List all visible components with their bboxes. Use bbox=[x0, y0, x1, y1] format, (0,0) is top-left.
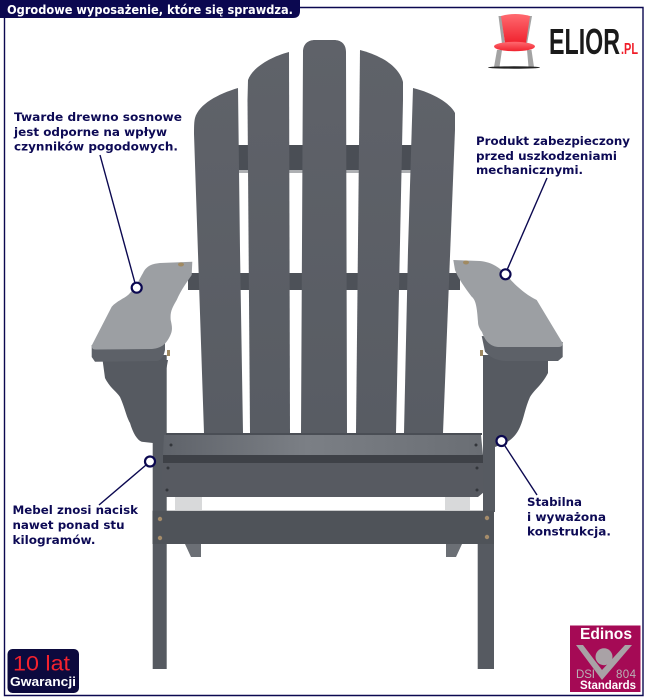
seat back edge bbox=[166, 433, 482, 435]
left arm bracket bbox=[103, 360, 168, 443]
bolt on right post bbox=[480, 350, 483, 356]
marker bbox=[500, 269, 510, 279]
leader line bbox=[507, 178, 547, 270]
backrest slat 4 bbox=[356, 50, 403, 433]
right armrest edge bbox=[482, 336, 563, 361]
left rear shadow under seat bbox=[175, 497, 202, 510]
right arm bolt bbox=[463, 260, 469, 264]
callout text bbox=[13, 110, 182, 154]
callout text: jest odporne na wpływ bbox=[13, 125, 167, 139]
callout text bbox=[12, 503, 138, 547]
right arm bracket bbox=[483, 358, 548, 447]
badge 804: 804 bbox=[616, 669, 637, 681]
right inner leg bbox=[446, 544, 462, 557]
seat gap shadow bbox=[163, 454, 483, 463]
callout text: Stabilna bbox=[527, 495, 582, 509]
warranty years: 10 lat bbox=[13, 652, 70, 676]
header bar: Ogrodowe wyposażenie, które się sprawdza. bbox=[7, 3, 293, 17]
callout text: nawet ponad stu bbox=[12, 518, 124, 532]
left lower leg bbox=[153, 544, 167, 669]
badge V mark bbox=[576, 645, 632, 680]
upper cross bar bbox=[236, 145, 414, 173]
lower cross bar bbox=[188, 273, 460, 290]
leader line bbox=[505, 446, 537, 495]
front rail bbox=[152, 511, 494, 544]
seat screws bbox=[166, 444, 478, 492]
left inner leg bbox=[185, 544, 201, 557]
badge circle bbox=[596, 648, 612, 665]
right rear shadow under seat bbox=[445, 497, 470, 510]
backrest slat 5 bbox=[404, 88, 455, 433]
warranty label: Gwarancji bbox=[10, 674, 76, 689]
callout text: czynników pogodowych. bbox=[14, 140, 178, 154]
left arm bolt bbox=[178, 262, 184, 266]
callout text bbox=[527, 495, 611, 538]
callout: wood bbox=[13, 110, 182, 293]
callout: protection bbox=[476, 134, 631, 279]
leader line bbox=[100, 155, 135, 283]
callout text: przed uszkodzeniami bbox=[476, 149, 617, 163]
marker bbox=[496, 436, 506, 446]
callout text: Produkt zabezpieczony bbox=[476, 134, 631, 148]
badge name: Edinos bbox=[580, 626, 632, 643]
bolt on left post bbox=[167, 350, 170, 356]
left armrest edge bbox=[92, 343, 165, 362]
leader line bbox=[99, 465, 146, 505]
seat front top slat bbox=[163, 435, 483, 455]
logo bbox=[488, 14, 638, 69]
badge standards: Standards bbox=[580, 680, 636, 692]
callout text bbox=[476, 134, 631, 177]
callout text: i wyważona bbox=[527, 510, 606, 524]
seat front lower slat bbox=[162, 463, 484, 497]
right armrest top bbox=[453, 260, 562, 347]
Edinos standards badge bbox=[570, 626, 640, 692]
left armrest top bbox=[92, 262, 192, 350]
logo domain: .PL bbox=[621, 41, 638, 58]
right rear post bbox=[483, 355, 495, 512]
logo chair icon bbox=[488, 14, 540, 69]
callout text: Twarde drewno sosnowe bbox=[14, 110, 182, 124]
chair illustration bbox=[92, 40, 563, 669]
marker bbox=[132, 283, 142, 293]
rail bolts bbox=[158, 516, 489, 540]
left rear post bbox=[153, 355, 167, 512]
marker bbox=[145, 456, 155, 466]
badge DSI: DSI bbox=[576, 669, 595, 681]
backrest slat 2 bbox=[248, 52, 290, 433]
warranty badge bbox=[8, 649, 79, 693]
callout text: konstrukcja. bbox=[527, 524, 611, 538]
backrest slat 1 bbox=[194, 88, 243, 433]
callout: load bbox=[12, 456, 155, 547]
callout text: Mebel znosi nacisk bbox=[12, 503, 138, 517]
callout text: mechanicznymi. bbox=[476, 163, 583, 177]
callout text: kilogramów. bbox=[12, 533, 96, 547]
right lower leg bbox=[478, 544, 494, 669]
callout: stability bbox=[496, 436, 611, 538]
backrest slat 3 bbox=[301, 40, 347, 433]
